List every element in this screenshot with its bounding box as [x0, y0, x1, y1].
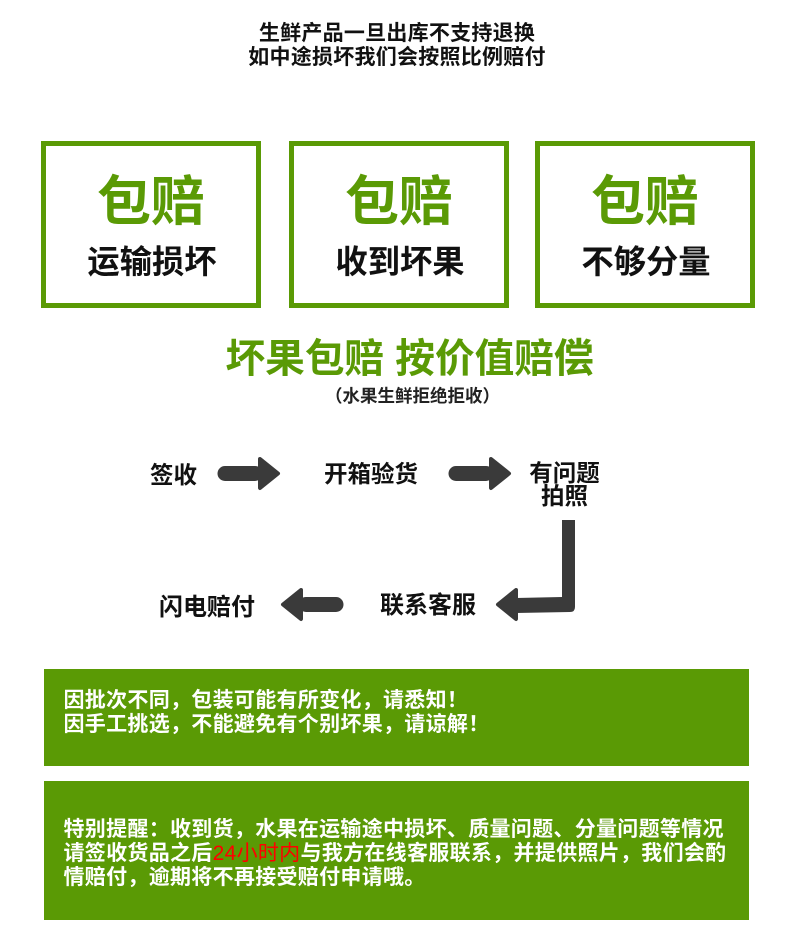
panel: transport damage: 包赔 — [97, 172, 205, 232]
panel: short weight: 不够分量 — [581, 244, 711, 280]
notice text line 2: 因手工挑选，不能避免有个别坏果，请谅解！ — [64, 713, 490, 736]
step: contact service: 联系客服 — [380, 592, 476, 619]
notice text line 1: 因批次不同，包装可能有所变化，请悉知！ — [64, 689, 468, 712]
reminder text line 1: 特别提醒：收到货，水果在运输途中损坏、质量问题、分量问题等情况 — [64, 818, 724, 841]
panel: special reminder — [44, 781, 749, 920]
step: open box: 开箱验货 — [324, 461, 418, 487]
panel: transport damage — [41, 141, 261, 308]
panel: short weight: 包赔 — [591, 172, 699, 232]
panel: transport damage: 运输损坏 — [87, 244, 217, 280]
panel: short weight — [535, 141, 755, 308]
heading: 坏果包赔 按价值赔偿 — [226, 337, 594, 381]
top notice: 生鲜产品一旦出库不支持退换 — [259, 22, 535, 45]
panel: received bad fruit: 收到坏果 — [335, 244, 465, 280]
step: take photo — [529, 460, 600, 508]
panel: received bad fruit: 包赔 — [345, 172, 453, 232]
subheading: （水果生鲜拒绝拒收） — [325, 386, 500, 406]
step: take photo: 拍照 — [541, 482, 588, 508]
top notice — [248, 22, 546, 69]
panel: batch notice — [44, 669, 749, 766]
reminder text line 3: 情赔付，逾期将不再接受赔付申请哦。 — [64, 866, 426, 889]
panel: received bad fruit — [289, 141, 509, 308]
step: take photo: 有问题 — [529, 460, 600, 486]
step: sign: 签收 — [150, 462, 197, 488]
step: quick compensation: 闪电赔付 — [159, 594, 255, 621]
reminder text line 2: 请签收货品之后24小时内与我方在线客服联系，并提供照片，我们会酌 — [64, 842, 726, 865]
top notice: 如中途损坏我们会按照比例赔付 — [248, 46, 546, 69]
